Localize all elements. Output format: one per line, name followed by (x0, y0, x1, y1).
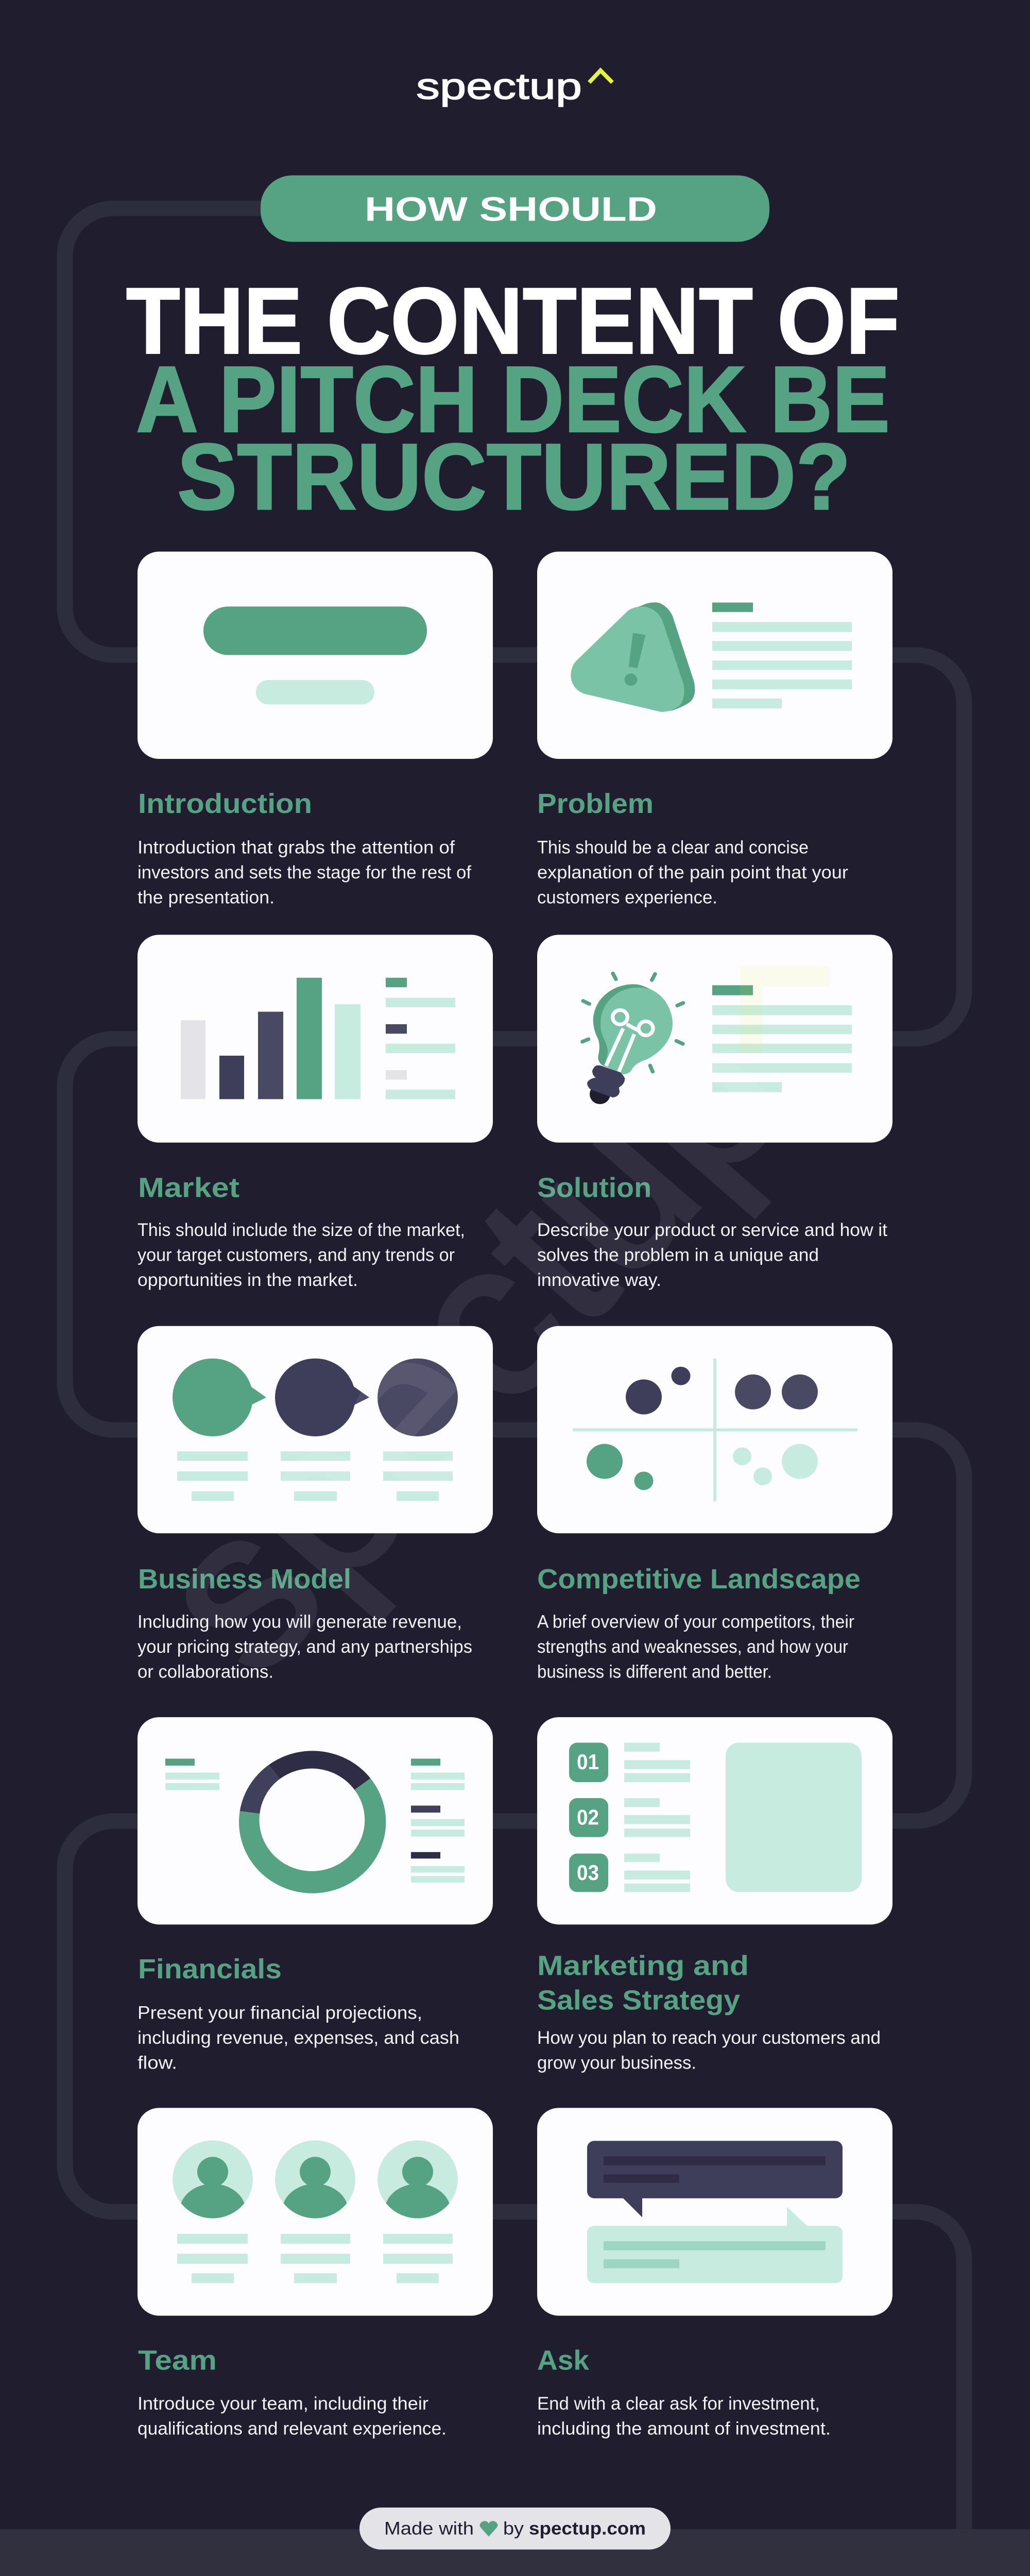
mint speech bubble (587, 2207, 843, 2283)
heading: problem: Problem (537, 789, 654, 819)
slide card: team members (138, 2108, 493, 2316)
connector path (65, 208, 964, 2529)
description: market: opportunities in the market. (138, 1270, 358, 1290)
description: financials (138, 2003, 459, 2073)
icon: warning triangle (571, 602, 695, 712)
slide card: light bulb (537, 935, 892, 1143)
footer band (0, 2529, 1030, 2576)
heading pill: how should (261, 175, 769, 242)
slide card: numbered list (537, 1717, 892, 1924)
description: ask (537, 2394, 831, 2438)
description: introduction (138, 837, 471, 907)
description: competitive landscape: A brief overview of your competitors, their (537, 1612, 854, 1632)
description: ask: including the amount of investment. (537, 2418, 831, 2438)
watermark: spectup (103, 970, 832, 1716)
donut chart (239, 1751, 386, 1893)
heading: marketing and sales strategy: Sales Strategy (537, 1985, 740, 2015)
panel: team (138, 2108, 493, 2438)
title: A PITCH DECK BE (136, 347, 890, 452)
description: team: Introduce your team, including their (138, 2394, 428, 2414)
panel: competitive landscape (537, 1326, 892, 1682)
description: financials: flow. (138, 2053, 177, 2073)
slide card: bar chart (138, 935, 493, 1143)
image placeholder (726, 1742, 862, 1892)
logo: spectup (416, 66, 582, 107)
avatar 1 (173, 2140, 253, 2218)
panel: marketing and sales strategy (537, 1717, 892, 2073)
name placeholder bars (177, 2234, 453, 2283)
heading: marketing and sales strategy: Marketing and (537, 1951, 749, 1981)
list bars (624, 1742, 690, 1892)
description: market: your target customers, and any trends or (138, 1245, 455, 1265)
description: marketing and sales strategy: grow your business. (537, 2053, 696, 2073)
heading: team: Team (138, 2345, 217, 2376)
panel: market (138, 935, 493, 1290)
footer badge: Made with (384, 2518, 474, 2538)
description: problem (537, 837, 848, 907)
badge 01: 01 (577, 1750, 599, 1774)
description: solution: solves the problem in a unique and (537, 1245, 819, 1265)
dark speech bubble (587, 2141, 843, 2217)
description: solution: innovative way. (537, 1270, 661, 1290)
slide card: speech bubbles (537, 2108, 892, 2316)
heading: competitive landscape: Competitive Landscape (537, 1564, 861, 1595)
panel: financials (138, 1717, 493, 2073)
slide card: quadrant (537, 1326, 892, 1533)
heading: ask: Ask (537, 2345, 590, 2376)
description: marketing and sales strategy: How you plan to reach your customers and (537, 2028, 881, 2048)
description: competitive landscape: business is different and better. (537, 1662, 772, 1682)
chart legend (386, 978, 455, 1099)
heading: introduction: Introduction (138, 789, 312, 819)
flow circles (173, 1359, 458, 1436)
text placeholder bars (177, 1451, 453, 1501)
panel: ask (537, 2108, 892, 2438)
heading pill: how should: HOW SHOULD (365, 191, 657, 228)
description: financials: Present your financial projections, (138, 2003, 422, 2023)
heading: solution: Solution (537, 1173, 651, 1203)
description: competitive landscape: strengths and weaknesses, and how your (537, 1636, 848, 1657)
description: solution (537, 1220, 887, 1290)
quadrant axes (573, 1359, 857, 1501)
description: business model: or collaborations. (138, 1662, 273, 1682)
description: marketing and sales strategy (537, 2028, 881, 2073)
footer badge: by (503, 2518, 524, 2538)
description: problem: explanation of the pain point that your (537, 862, 848, 883)
description: problem: This should be a clear and concise (537, 837, 809, 857)
heading: marketing and sales strategy (537, 1951, 749, 2015)
title: STRUCTURED? (177, 425, 851, 530)
panel: introduction (138, 552, 493, 907)
slide card: warning (537, 552, 892, 759)
heading: market: Market (138, 1173, 239, 1203)
description: problem: customers experience. (537, 887, 717, 907)
badge 01 (569, 1742, 608, 1782)
description: introduction: the presentation. (138, 887, 274, 907)
description: team: qualifications and relevant experience. (138, 2418, 447, 2438)
slide card: three circles (138, 1326, 493, 1533)
legend left (165, 1758, 219, 1790)
legend right (411, 1758, 465, 1883)
description: competitive landscape (537, 1612, 854, 1682)
title (126, 268, 900, 530)
icon: light bulb (582, 973, 683, 1104)
avatar 2 (275, 2140, 355, 2218)
description: introduction: Introduction that grabs the attention of (138, 837, 455, 857)
badge 03 (569, 1854, 608, 1892)
heading: financials: Financials (138, 1954, 282, 1985)
quadrant dots (587, 1367, 818, 1490)
description: ask: End with a clear ask for investment, (537, 2394, 820, 2414)
slide card: donut chart (138, 1717, 493, 1924)
panel: solution (537, 935, 892, 1290)
badge 03: 03 (577, 1861, 599, 1885)
footer badge (359, 2507, 671, 2550)
badge 02 (569, 1798, 608, 1837)
description: business model: Including how you will generate revenue, (138, 1612, 462, 1632)
description: market: This should include the size of the market, (138, 1220, 465, 1240)
avatar 3 (377, 2140, 458, 2218)
badge 02: 02 (577, 1805, 599, 1829)
description: introduction: investors and sets the stage for the rest of (138, 862, 471, 883)
panel: business model (138, 1326, 493, 1682)
description: team (138, 2394, 447, 2438)
panel: problem (537, 552, 892, 907)
footer badge: spectup.com (529, 2518, 646, 2538)
description: solution: Describe your product or service and how it (537, 1220, 887, 1240)
icon: heart (479, 2521, 498, 2536)
description: market (138, 1220, 465, 1290)
description: business model (138, 1612, 472, 1682)
description: financials: including revenue, expenses, and cash (138, 2028, 459, 2048)
logo (416, 66, 612, 107)
bar chart (181, 978, 360, 1099)
description: business model: your pricing strategy, and any partnerships (138, 1636, 472, 1657)
slide card: title slide (138, 552, 493, 759)
heading: business model: Business Model (138, 1564, 351, 1595)
title: THE CONTENT OF (126, 268, 900, 374)
